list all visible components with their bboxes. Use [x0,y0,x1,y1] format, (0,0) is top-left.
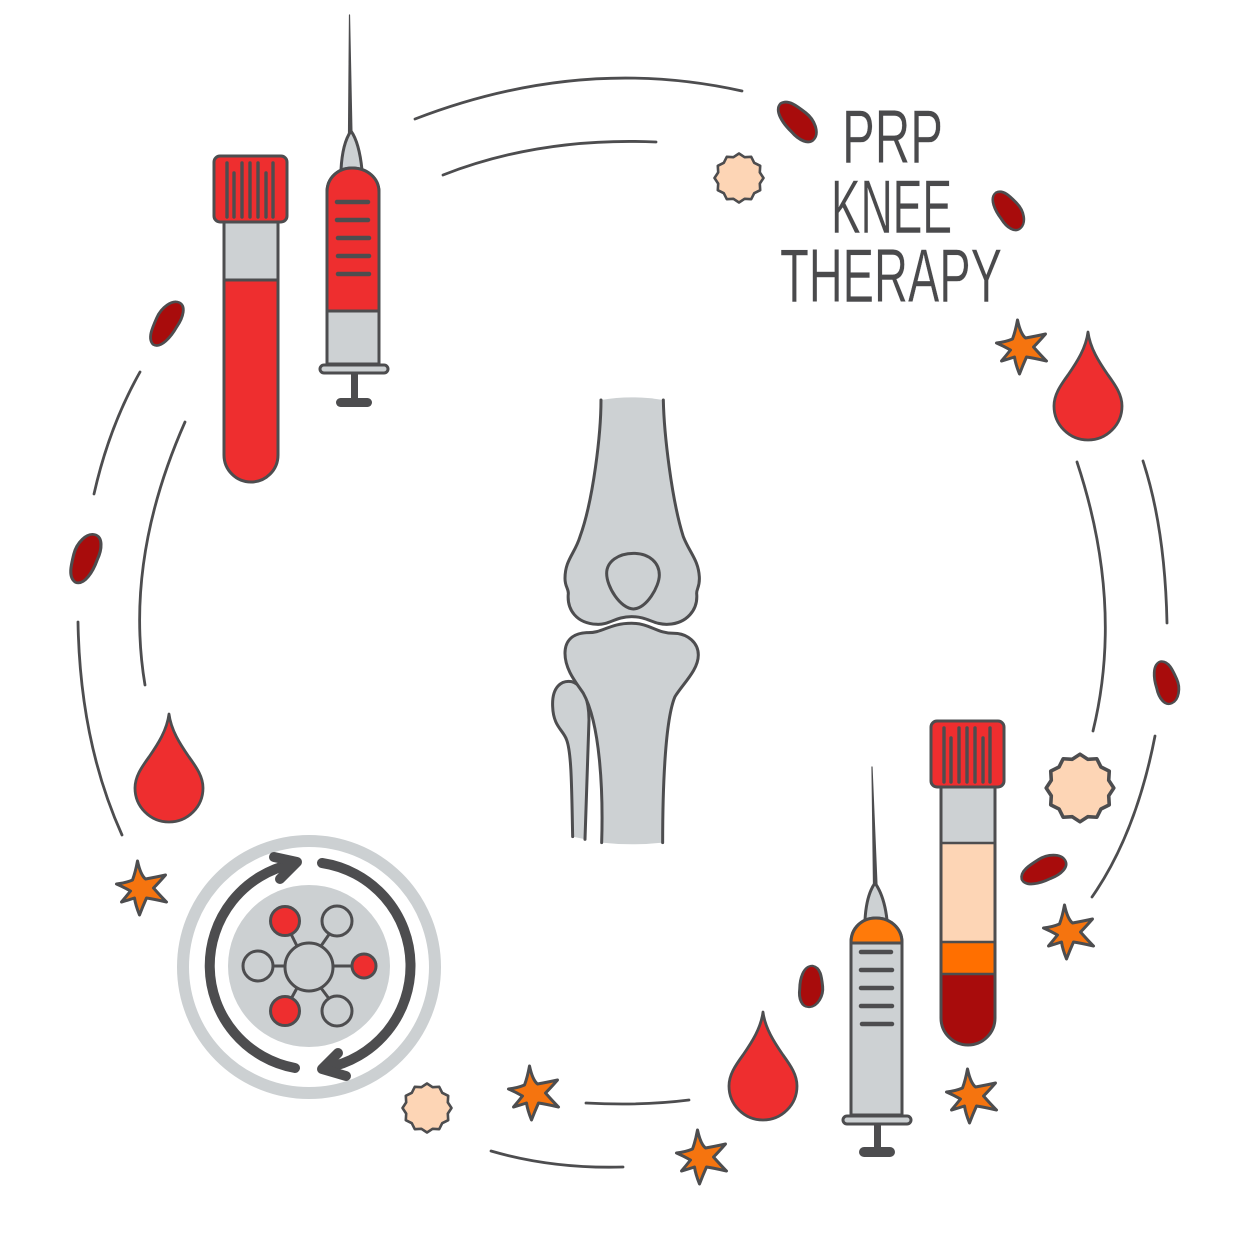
icons: blood drops [135,332,1122,1120]
title: PRP [842,95,943,180]
patella [607,553,659,609]
inner disk [228,885,390,1047]
title [780,95,1002,319]
title: THERAPY [780,234,1002,319]
icons: peach platelets [402,154,1114,1132]
icon: centrifuge process [183,841,435,1093]
icon: separated plasma tube [931,721,1004,1045]
circular arc lines [78,78,1167,1167]
icon: syringe with red blood [320,15,388,407]
icon: syringe with orange plasma [843,767,911,1157]
icon: blood tube, full red [214,156,287,482]
icons: orange activated platelets [116,320,1094,1184]
molecule network [243,906,376,1026]
icons: dark red blood cells [67,97,1185,1008]
outer ring [183,841,435,1093]
icon: knee joint bones [553,397,699,844]
femur [565,397,699,624]
title: KNEE [831,165,952,250]
fibula [553,681,589,839]
rotation arrows [210,857,411,1076]
tibia [565,623,698,844]
